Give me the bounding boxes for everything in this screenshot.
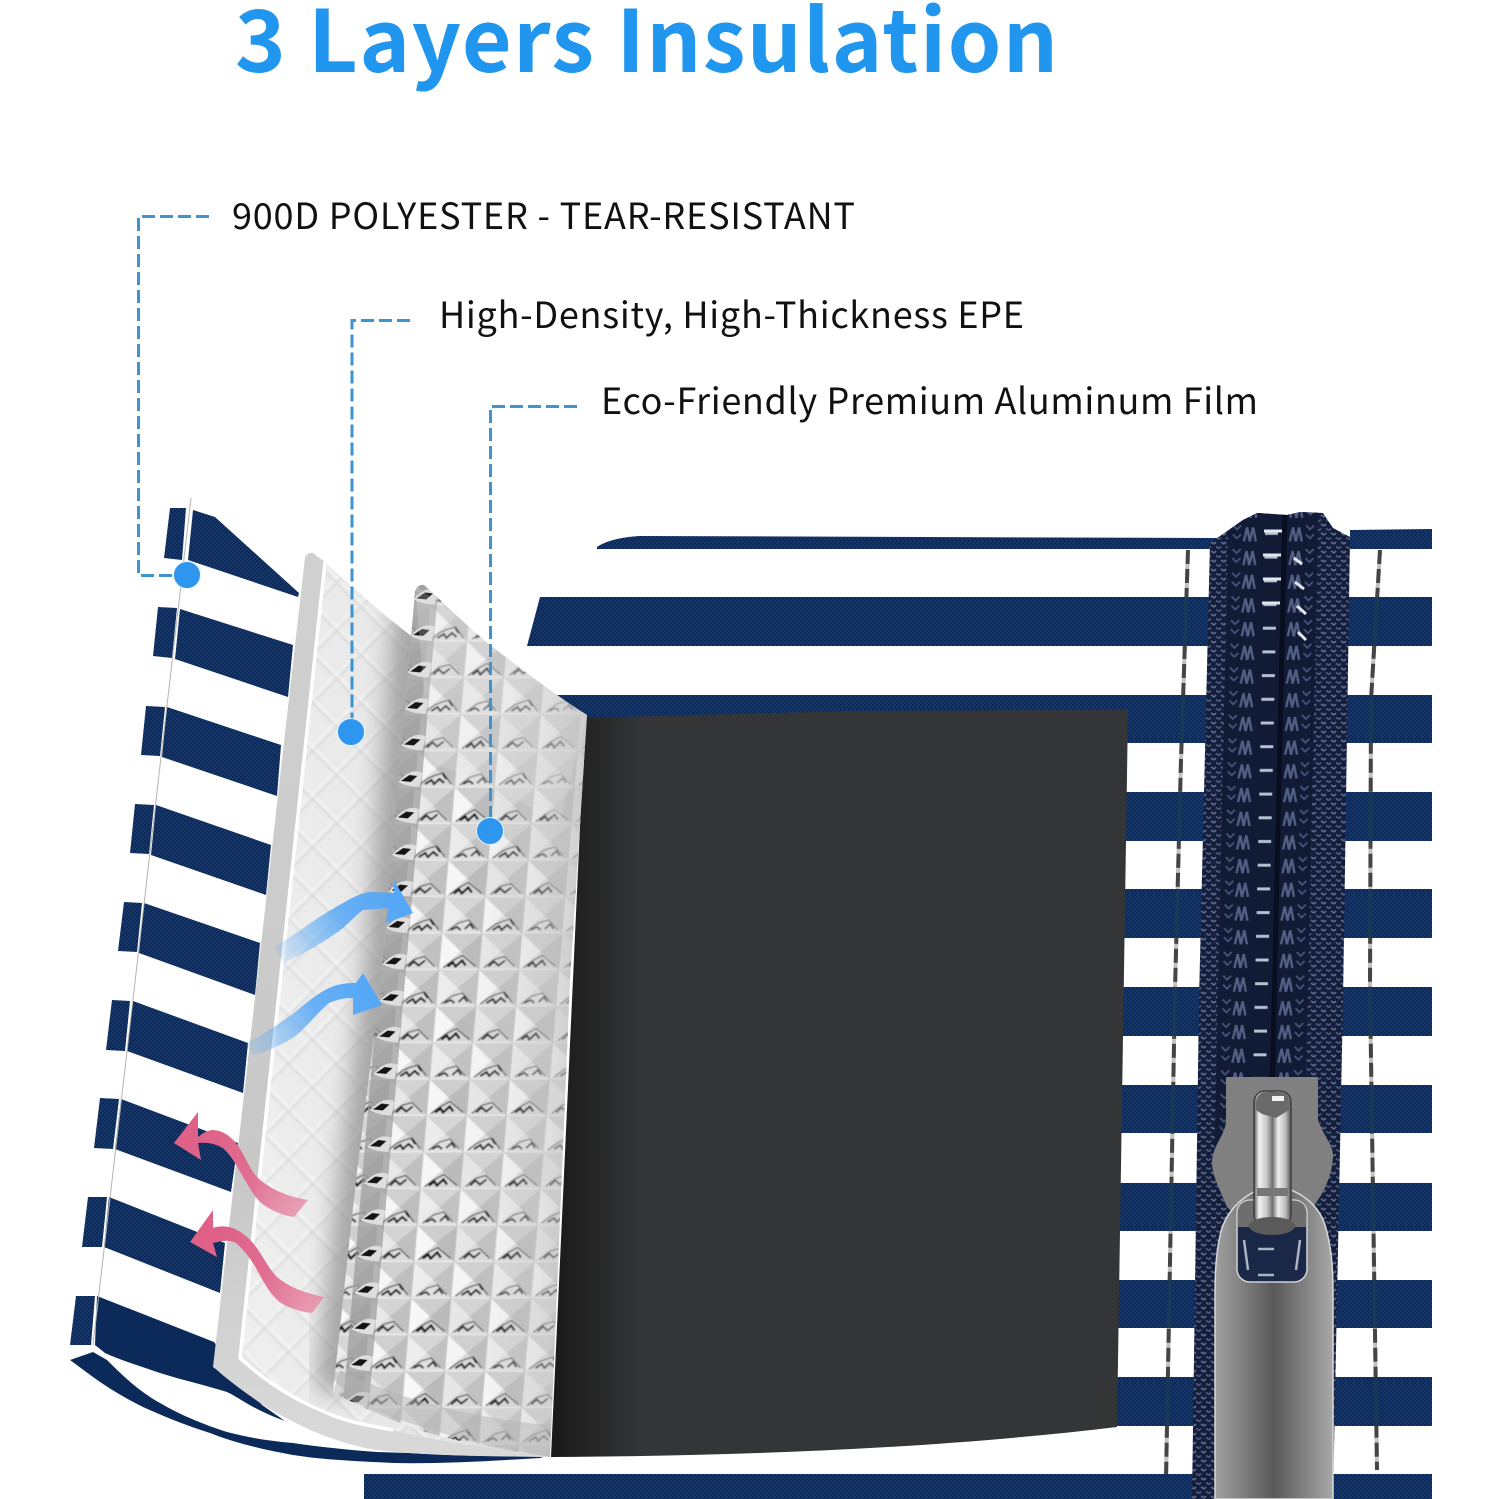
callout: polyester leader (138, 216, 209, 588)
callout dot: EPE (338, 718, 364, 746)
EPE foam layer (213, 553, 546, 1457)
flap stripes: seam allowance (70, 508, 186, 1345)
inner dark lining panel (551, 710, 1128, 1457)
zipper tape (1185, 505, 1355, 1499)
arrow: warm air 2 (190, 1210, 324, 1313)
label: middle layer: High-Density, High-Thickness EPE (439, 287, 1024, 339)
EPE highlight edge (240, 562, 393, 1430)
ring top cap (1256, 1092, 1289, 1118)
navy stripes (364, 529, 1432, 1499)
EPE body (213, 553, 546, 1457)
callout dot: polyester (174, 562, 200, 588)
aluminum foil layer (333, 584, 587, 1457)
stitching over navy stripes (1165, 597, 1379, 1426)
bright teeth highlights at top (1262, 531, 1306, 640)
EPE rim (213, 553, 546, 1457)
ring lower band (1257, 1188, 1288, 1196)
zipper slider (1212, 1077, 1333, 1499)
label: outer layer: 900D POLYESTER - TEAR-RESISTANT (232, 188, 855, 240)
flap seam line (93, 498, 191, 1345)
shadow cast by foil on EPE (333, 610, 412, 1392)
pull tab (1215, 1187, 1333, 1499)
foil bottom shade (333, 1370, 552, 1457)
stitching: left seam (1166, 550, 1188, 1480)
callout: foil leader (476, 406, 577, 844)
slider body (1212, 1077, 1333, 1225)
EPE quilting (213, 572, 521, 1457)
flap stripes: main (95, 510, 299, 1421)
tab window lip (1238, 1201, 1306, 1227)
foil sheen (448, 667, 587, 1456)
foil embossed squares (333, 584, 587, 1457)
zipper teeth (1214, 510, 1318, 1150)
arrow: warm air 1 (174, 1112, 308, 1217)
zipper (1185, 505, 1355, 1499)
ring cap glint (1272, 1096, 1284, 1101)
flap bottom curve (70, 1352, 547, 1463)
window teeth (1244, 1240, 1300, 1275)
foil top sheen (415, 585, 587, 820)
arrow: cold air 1 (274, 880, 413, 963)
label: inner layer: Eco-Friendly Premium Aluminum Film (601, 373, 1258, 425)
arrow: cold air 2 (246, 973, 382, 1055)
pull ring (1249, 1091, 1295, 1235)
tab window (1237, 1200, 1307, 1282)
foil scalloped edge (344, 584, 438, 1410)
callout: EPE leader (338, 320, 410, 746)
striped bag body: right side (364, 529, 1432, 1499)
stitching: right seam (1370, 550, 1380, 1470)
striped outer fabric flap (70, 498, 547, 1463)
callout dot: foil (476, 818, 504, 844)
ring base (1249, 1217, 1295, 1235)
